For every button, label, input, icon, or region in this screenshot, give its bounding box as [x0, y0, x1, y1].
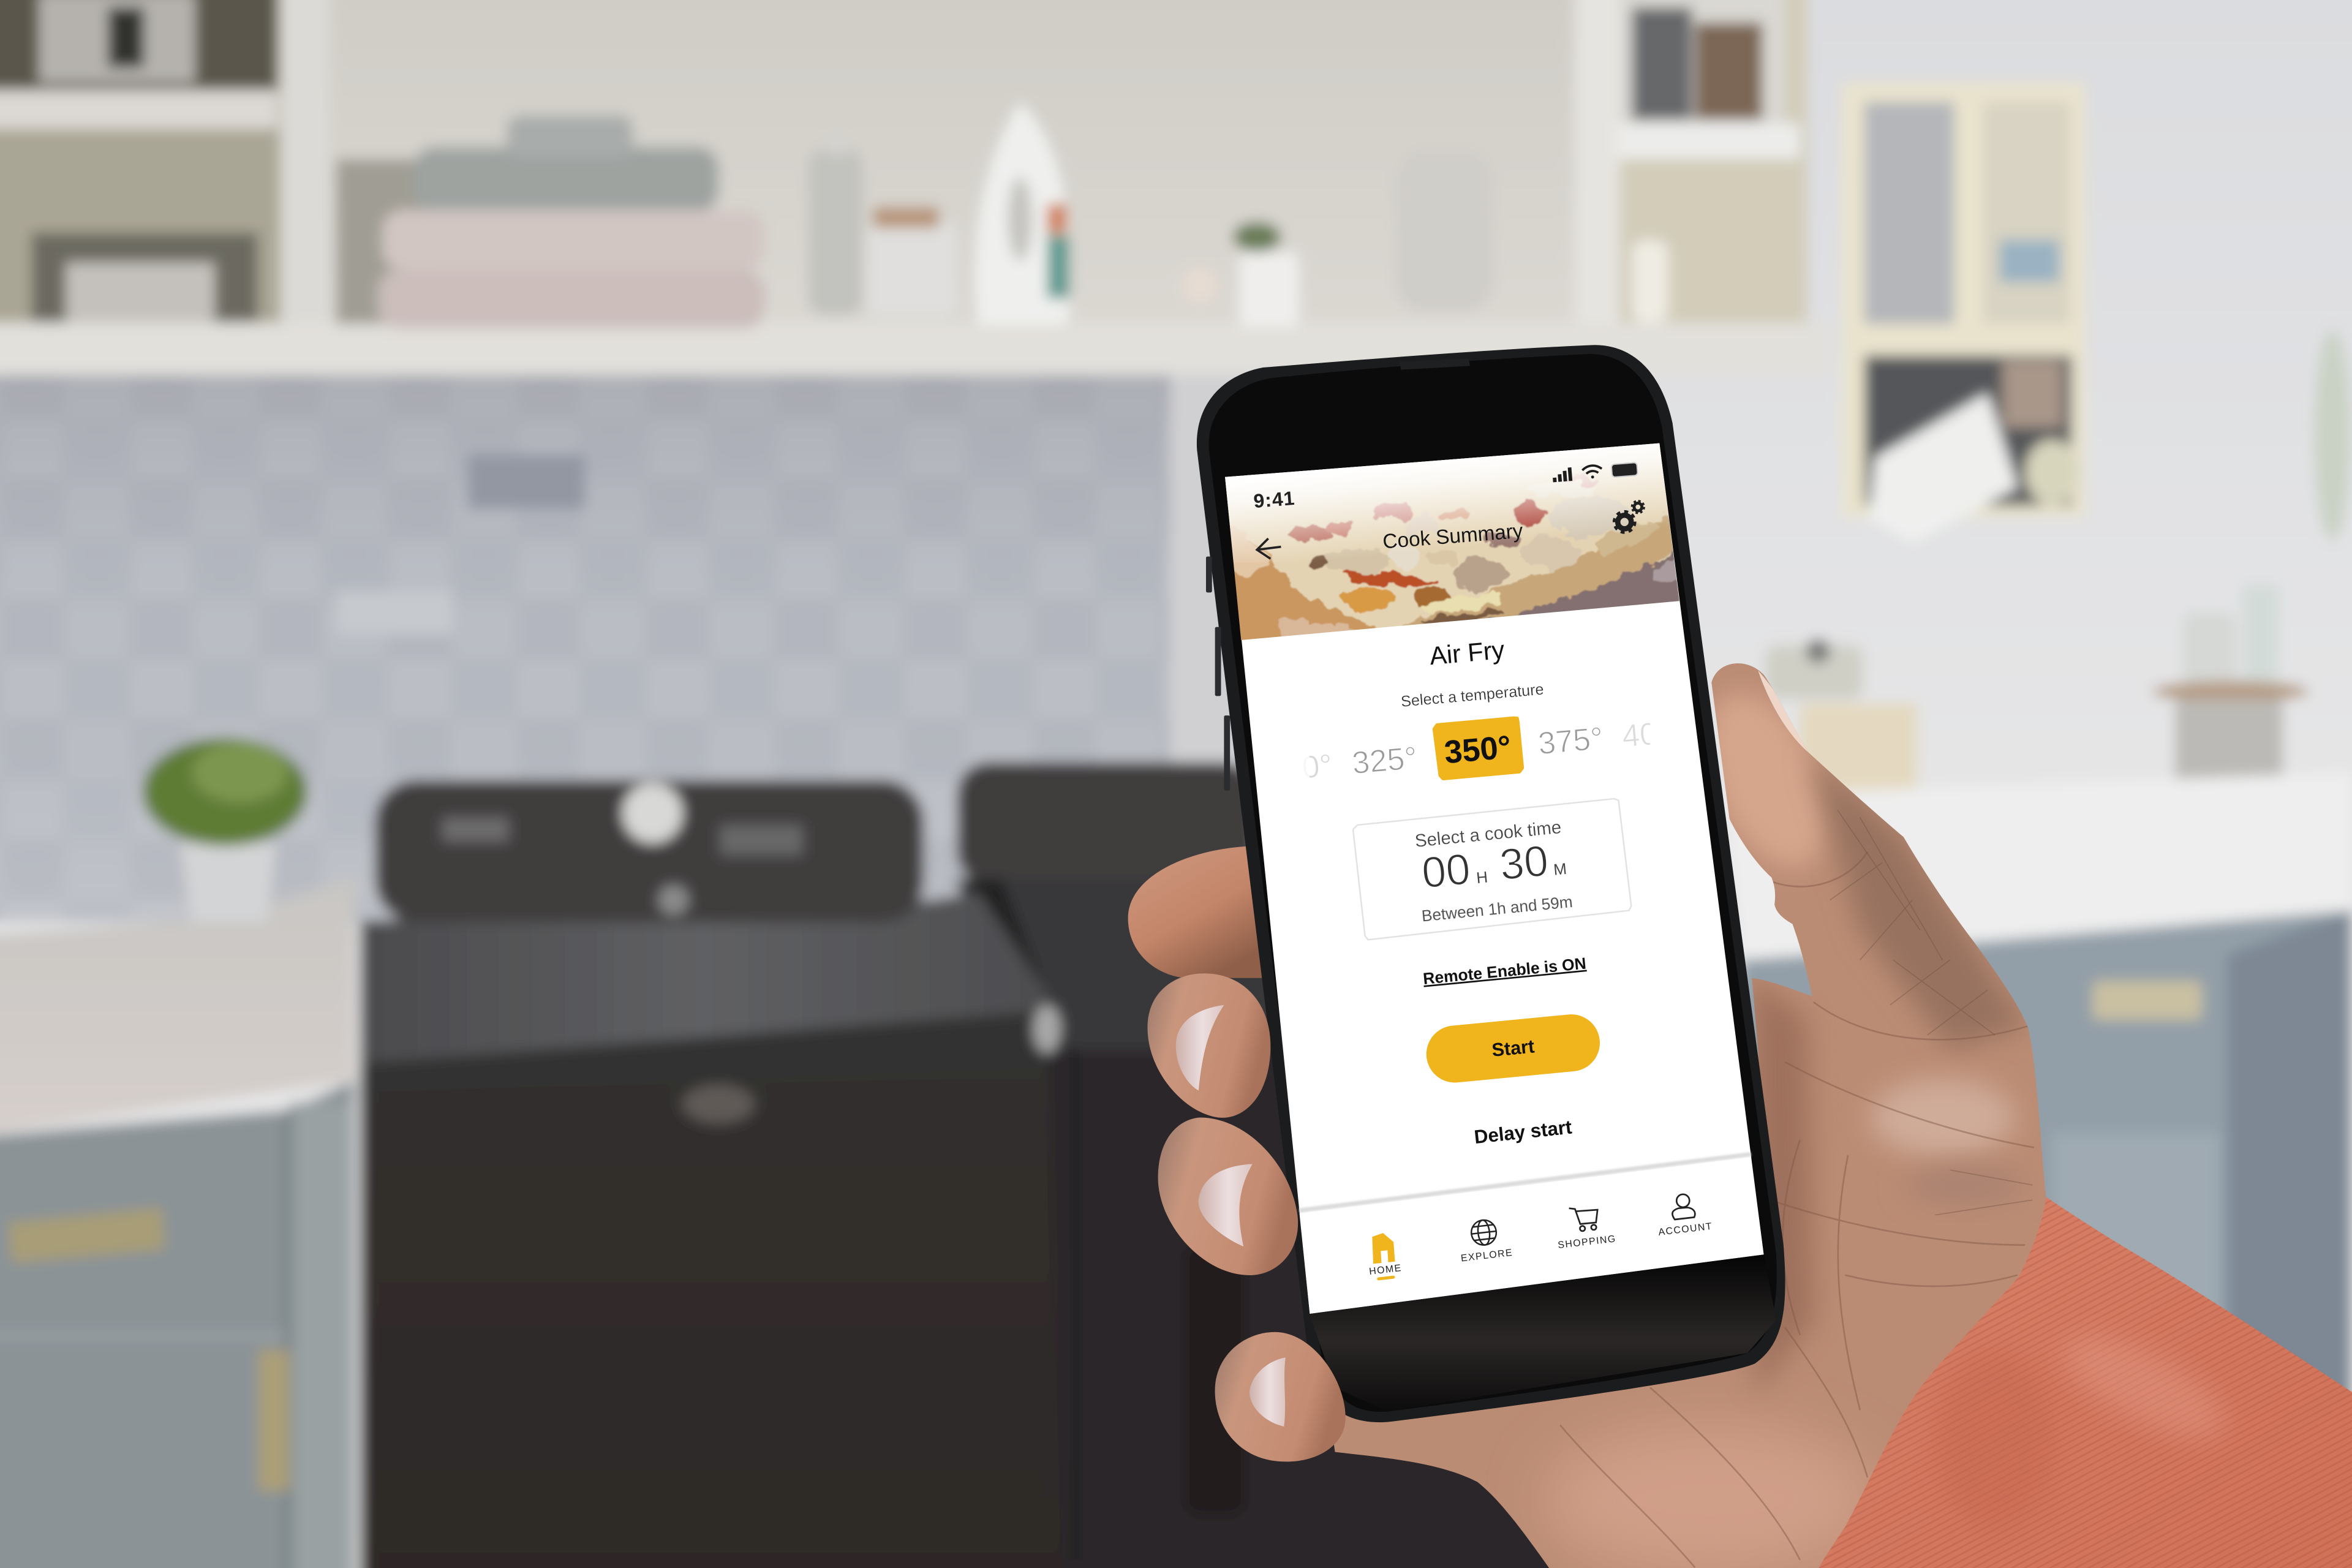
folded towels	[336, 116, 765, 328]
second washer	[954, 762, 1617, 1568]
time: 9:41	[1253, 487, 1296, 512]
screen	[1225, 443, 1764, 1314]
cook time card	[1353, 799, 1631, 940]
wifi icon	[1582, 465, 1602, 479]
inner bezel	[1209, 354, 1777, 1412]
knuckle wrinkles	[1830, 810, 2032, 1215]
ring finger	[1158, 1117, 1298, 1275]
screen title: Cook Summary	[1382, 520, 1524, 553]
left shelf cubby	[0, 0, 282, 330]
nav: home: HOME	[1368, 1263, 1403, 1277]
cook time card: 30	[1498, 837, 1550, 889]
start button: Start	[1491, 1036, 1536, 1061]
battery icon	[1611, 462, 1638, 477]
pinky finger	[1215, 1332, 1346, 1461]
screen content	[1253, 462, 1764, 1314]
thumb pad highlight	[1714, 688, 1826, 871]
phone	[1185, 345, 1785, 1422]
bottom navigation	[1300, 1154, 1764, 1314]
cook time card: H	[1476, 869, 1488, 887]
tile backsplash	[0, 375, 1275, 922]
right counter	[1725, 772, 2352, 960]
lower palm tone	[1545, 1425, 1875, 1568]
cook time card: Between 1h and 59m	[1421, 892, 1574, 925]
middle finger	[1147, 973, 1270, 1118]
index finger, behind phone	[1128, 846, 1267, 978]
right shelf cubby	[1617, 0, 1807, 323]
side buttons	[1206, 557, 1230, 791]
nav: shopping: SHOPPING	[1558, 1234, 1617, 1251]
status bar	[1253, 462, 1638, 512]
left counter	[0, 878, 354, 1136]
plant in white pot	[143, 738, 307, 922]
back of hand highlight	[1871, 1079, 2015, 1156]
hand: palm and thumb	[1305, 645, 2070, 1568]
temperature picker: 375°	[1537, 720, 1605, 761]
phone body	[1197, 345, 1785, 1422]
nav: home	[1368, 1233, 1403, 1281]
vertical shelf divider	[281, 0, 330, 337]
cook time card: M	[1553, 861, 1567, 879]
shadow beside phone	[1752, 975, 1815, 1395]
right counter items	[1765, 330, 2351, 807]
temperature picker: 325°	[1351, 739, 1419, 780]
sleeve	[1815, 1197, 2352, 1568]
nav: shopping	[1558, 1208, 1617, 1251]
cook time card: Select a cook time	[1414, 817, 1562, 851]
right cabinet	[1740, 911, 2352, 1567]
nav: account	[1658, 1194, 1713, 1238]
settings gears	[1615, 501, 1644, 532]
thumb and palm creases	[1560, 852, 2034, 1567]
remote enable link: Remote Enable is ON	[1422, 954, 1587, 988]
signal bars	[1552, 467, 1572, 482]
fingers wrapping phone	[1147, 973, 1346, 1461]
back arrow	[1257, 538, 1281, 559]
start button	[1424, 1012, 1602, 1085]
wall pin board	[1842, 83, 2085, 543]
nav: explore: EXPLORE	[1460, 1248, 1513, 1264]
nav: account: ACCOUNT	[1658, 1221, 1713, 1238]
thumb tip sliver	[1758, 671, 1809, 753]
temperature picker: 0°	[1300, 747, 1333, 785]
front washer	[360, 780, 1062, 1568]
left cabinet	[0, 1080, 354, 1568]
knuckle shading	[1809, 753, 2028, 1050]
pizza photo	[1185, 420, 1710, 668]
nav: explore	[1460, 1219, 1513, 1264]
heading: Air Fry: Air Fry	[1428, 635, 1506, 670]
speaker slot	[1400, 358, 1470, 370]
shelf unit back wall	[323, 0, 1590, 330]
bottom chin reflection	[1310, 1254, 1776, 1411]
label: select temperature: Select a temperature	[1400, 681, 1545, 710]
long shelf	[0, 323, 1830, 375]
white fade over photo top	[1200, 435, 1710, 562]
temperature picker	[1296, 705, 1671, 786]
shelf bottles and jars	[809, 102, 1494, 327]
cook time card: 00	[1420, 845, 1472, 898]
selected temperature	[1434, 718, 1523, 779]
temperature picker: 40	[1621, 715, 1659, 754]
delay start link: Delay start	[1473, 1116, 1574, 1148]
selected temperature: 350°	[1443, 729, 1512, 771]
